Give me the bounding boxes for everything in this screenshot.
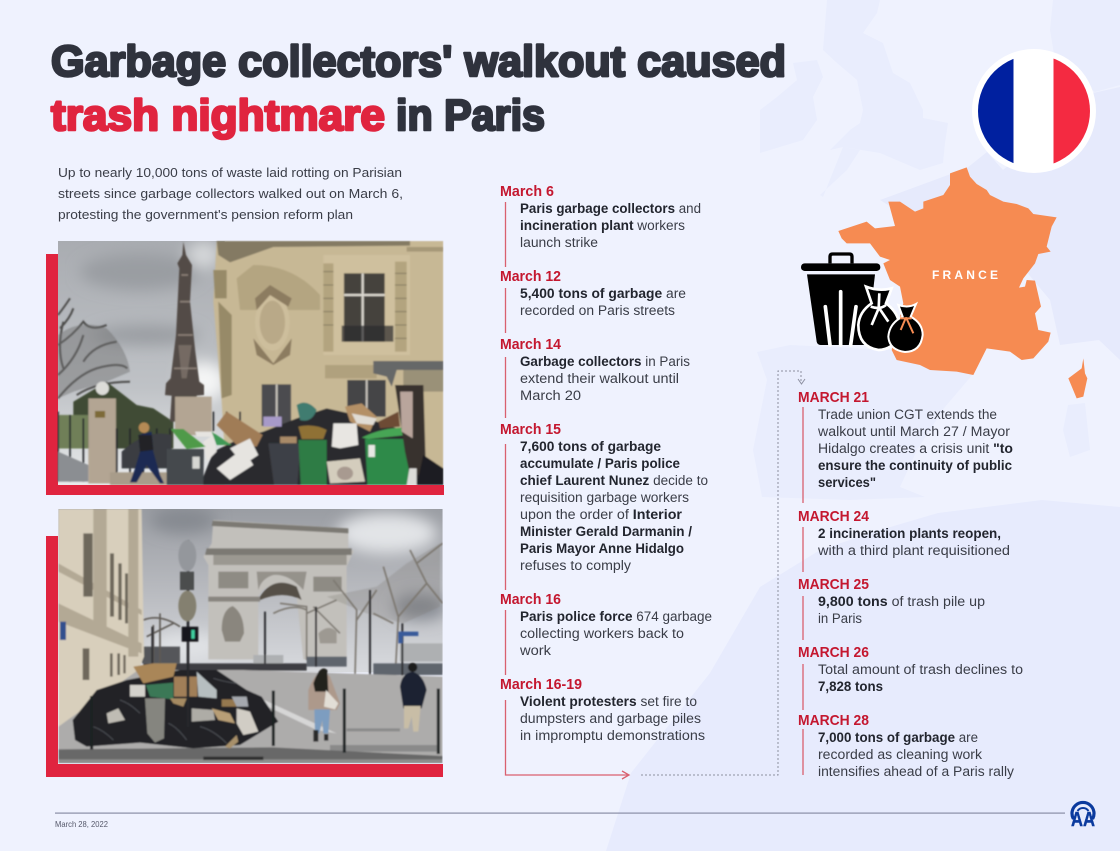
intro text: streets since garbage collectors walked out on March 6,: [58, 186, 403, 201]
title: Garbage collectors' walkout caused: [51, 37, 786, 86]
entry: March 15: Paris Mayor Anne Hidalgo: [520, 541, 684, 556]
title: in Paris: [396, 91, 545, 140]
entry: March 12: March 12: [500, 268, 561, 285]
entry: March 15: Minister Gerald Darmanin /: [520, 524, 692, 539]
entry: March 25: [798, 576, 985, 626]
entry: March 24: [798, 508, 1010, 558]
intro text: [58, 165, 403, 222]
entry: March 16: collecting workers back to: [520, 626, 684, 641]
entry: March 15: refuses to comply: [520, 558, 631, 573]
entry: March 14: Garbage collectors in Paris: [520, 354, 690, 369]
icon: Anadolu Agency logo: [1071, 802, 1095, 831]
entry: March 15: accumulate / Paris police: [520, 456, 680, 471]
entry: March 16: Paris police force 674 garbage: [520, 609, 712, 624]
entry: March 6: [500, 183, 701, 250]
intro text: Up to nearly 10,000 tons of waste laid rotting on Parisian: [58, 165, 402, 180]
entry: March 28: [798, 712, 1014, 779]
entry: March 24: MARCH 24: [798, 508, 870, 525]
entry: March 21: walkout until March 27 / Mayor: [817, 424, 1011, 439]
entry: March 26: [798, 644, 1023, 694]
photo 1: trash near Eiffel Tower: [46, 241, 444, 495]
entry: March 21: MARCH 21: [798, 389, 869, 406]
entry: March 26: MARCH 26: [798, 644, 869, 661]
entry: March 6: incineration plant workers: [520, 218, 685, 233]
entry: March 21: [798, 389, 1013, 490]
entry: March 12: 5,400 tons of garbage are: [520, 286, 686, 301]
flag of France: [970, 49, 1104, 175]
icon: Anadolu Agency logo: AA: [1071, 809, 1095, 831]
entry: March 26: 7,828 tons: [818, 679, 883, 694]
entry: March 14: March 14: [500, 336, 562, 353]
entry: March 15: 7,600 tons of garbage: [520, 439, 661, 454]
entry: March 25: MARCH 25: [798, 576, 869, 593]
entry: March 16-19: March 16-19: [500, 676, 582, 693]
entry: March 25: 9,800 tons of trash pile up: [818, 594, 985, 609]
entry: March 14: [500, 336, 690, 403]
title: [51, 37, 786, 140]
entry: March 16: work: [519, 643, 551, 658]
entry: March 28: intensifies ahead of a Paris rally: [818, 764, 1014, 779]
map of France: [838, 167, 1087, 398]
map of France: FRANCE: [932, 268, 998, 282]
entry: March 16: [500, 591, 712, 658]
photo 2: trash near Arc de Triomphe: [46, 507, 447, 777]
entry: March 15: requisition garbage workers: [520, 490, 689, 505]
entry: March 12: [500, 268, 686, 318]
entry: March 16-19: in impromptu demonstrations: [520, 728, 705, 743]
entry: March 16-19: [500, 676, 705, 743]
entry: March 15: chief Laurent Nunez decide to: [520, 473, 708, 488]
entry: March 16: March 16: [500, 591, 561, 608]
entry: March 21: Trade union CGT extends the: [818, 407, 997, 422]
entry: March 24: 2 incineration plants reopen,: [818, 526, 1001, 541]
entry: March 16-19: Violent protesters set fire to: [520, 694, 697, 709]
arrow: dotted connector between columns: [641, 371, 805, 775]
entry: March 21: services": [818, 475, 876, 490]
entry: March 24: with a third plant requisitioned: [817, 543, 1010, 558]
timeline: left column: [500, 183, 712, 779]
footer: date and rule: March 28, 2022: [55, 819, 108, 829]
title: trash nightmare: [51, 91, 385, 140]
icon: trash bin and garbage bags: [801, 254, 923, 352]
entry: March 15: upon the order of Interior: [520, 507, 683, 522]
entry: March 14: March 20: [520, 388, 581, 403]
entry: March 6: launch strike: [520, 235, 598, 250]
entry: March 12: recorded on Paris streets: [520, 303, 675, 318]
entry: March 21: Hidalgo creates a crisis unit "to: [818, 441, 1013, 456]
entry: March 28: MARCH 28: [798, 712, 869, 729]
entry: March 21: ensure the continuity of public: [818, 458, 1012, 473]
entry: March 14: extend their walkout until: [520, 371, 679, 386]
entry: March 26: Total amount of trash declines to: [818, 662, 1023, 677]
intro text: protesting the government's pension reform plan: [58, 207, 353, 222]
entry: March 6: March 6: [500, 183, 554, 200]
entry: March 6: Paris garbage collectors and: [520, 201, 701, 216]
entry: March 25: in Paris: [818, 611, 862, 626]
entry: March 28: 7,000 tons of garbage are: [818, 730, 978, 745]
entry: March 15: [500, 421, 708, 573]
entry: March 15: March 15: [500, 421, 561, 438]
timeline: right column: [798, 389, 1023, 779]
entry: March 16-19: dumpsters and garbage piles: [520, 711, 701, 726]
entry: March 28: recorded as cleaning work: [818, 747, 982, 762]
